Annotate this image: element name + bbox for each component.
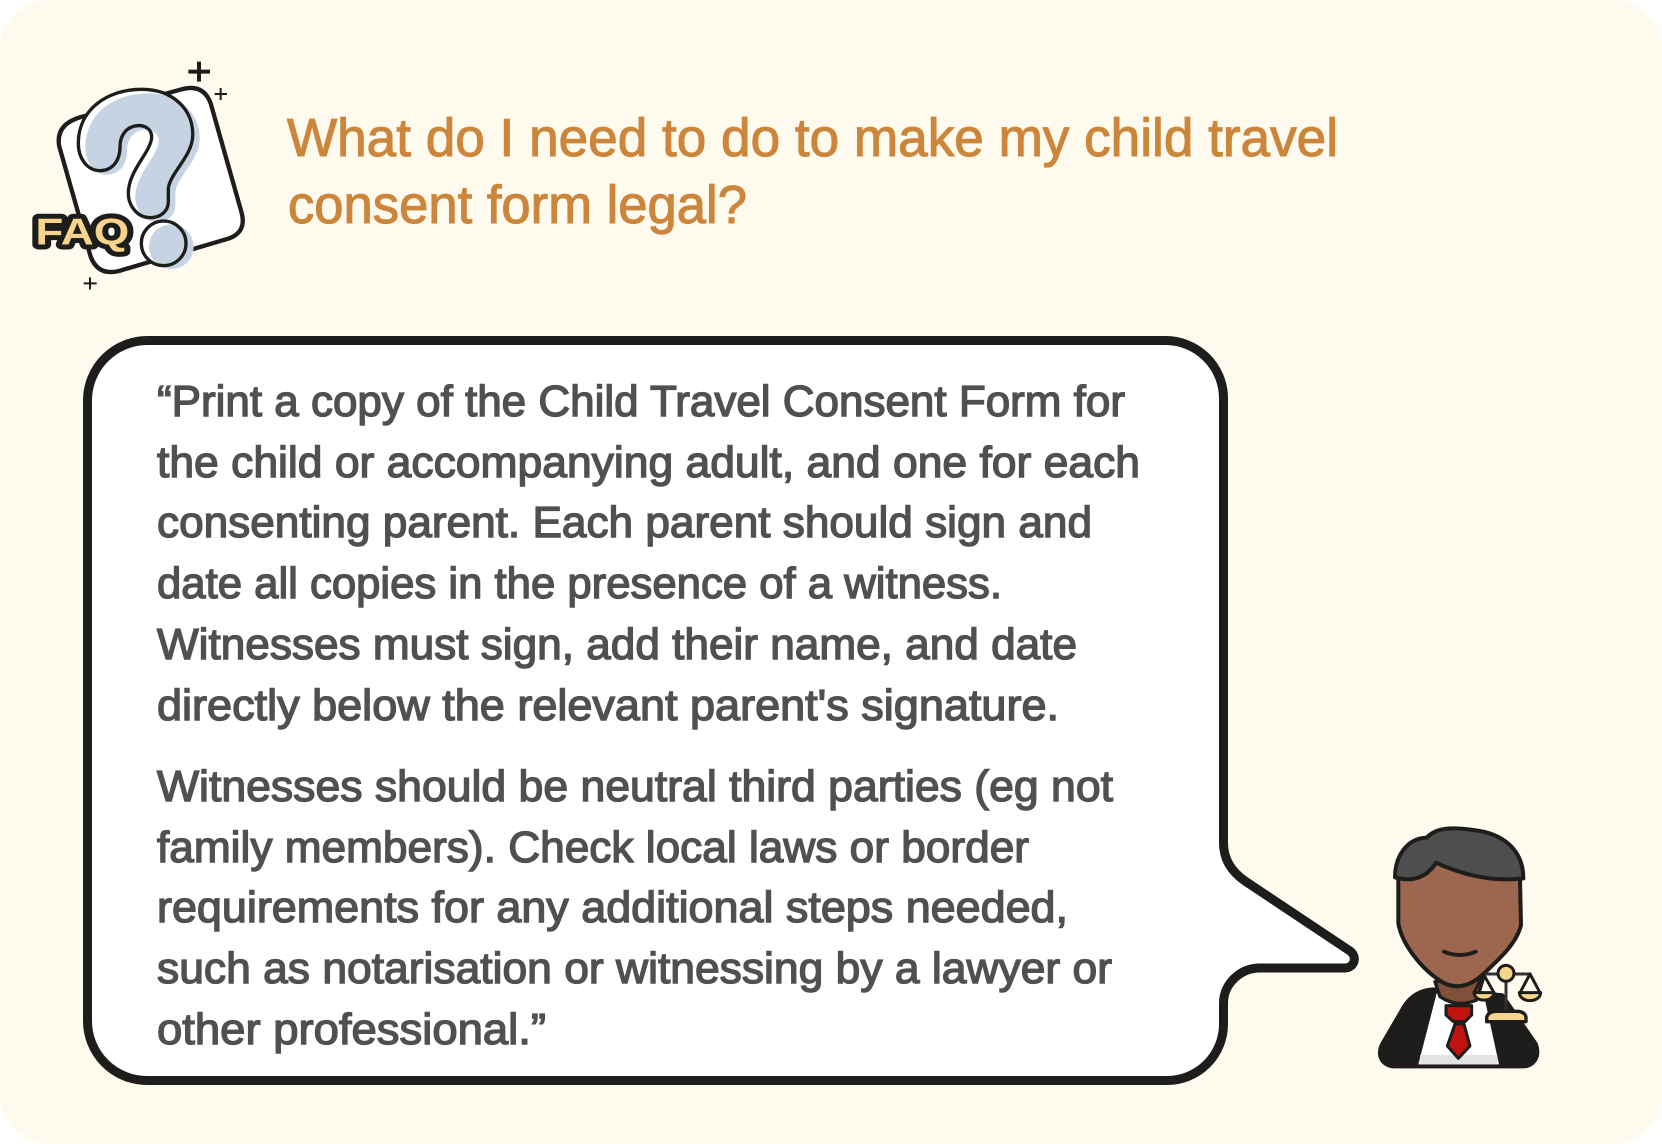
text block: second paragraph: Witnesses should be neutral third parties (eg not	[157, 763, 1113, 811]
text block: second paragraph: such as notarisation or witnessing by a lawyer or	[157, 945, 1112, 993]
heading: consent form legal?	[288, 176, 747, 235]
text block: first paragraph: date all copies in the presence of a witness.	[157, 560, 1002, 608]
text block: second paragraph: other professional.”	[157, 1006, 546, 1054]
heading: What do I need to do to make my child travel	[287, 109, 1338, 168]
heading	[287, 109, 1338, 235]
icon: FAQ question mark card: FAQ	[35, 211, 129, 252]
text block: first paragraph	[157, 378, 1140, 730]
icon: FAQ question mark card	[35, 62, 243, 289]
text block: first paragraph: directly below the relevant parent's signature.	[157, 682, 1059, 730]
text block: second paragraph: family members). Check local laws or border	[157, 824, 1029, 872]
text block: first paragraph: Witnesses must sign, add their name, and date	[157, 621, 1077, 669]
text block: second paragraph: requirements for any additional steps needed,	[157, 884, 1068, 932]
speech bubble	[88, 340, 1354, 1080]
text block: first paragraph: consenting parent. Each parent should sign and	[157, 499, 1092, 547]
text block: second paragraph	[157, 763, 1113, 1054]
icon: lawyer with scales	[1378, 828, 1541, 1068]
text block: first paragraph: the child or accompanying adult, and one for each	[157, 439, 1140, 487]
text block: first paragraph: “Print a copy of the Child Travel Consent Form for	[157, 378, 1125, 426]
